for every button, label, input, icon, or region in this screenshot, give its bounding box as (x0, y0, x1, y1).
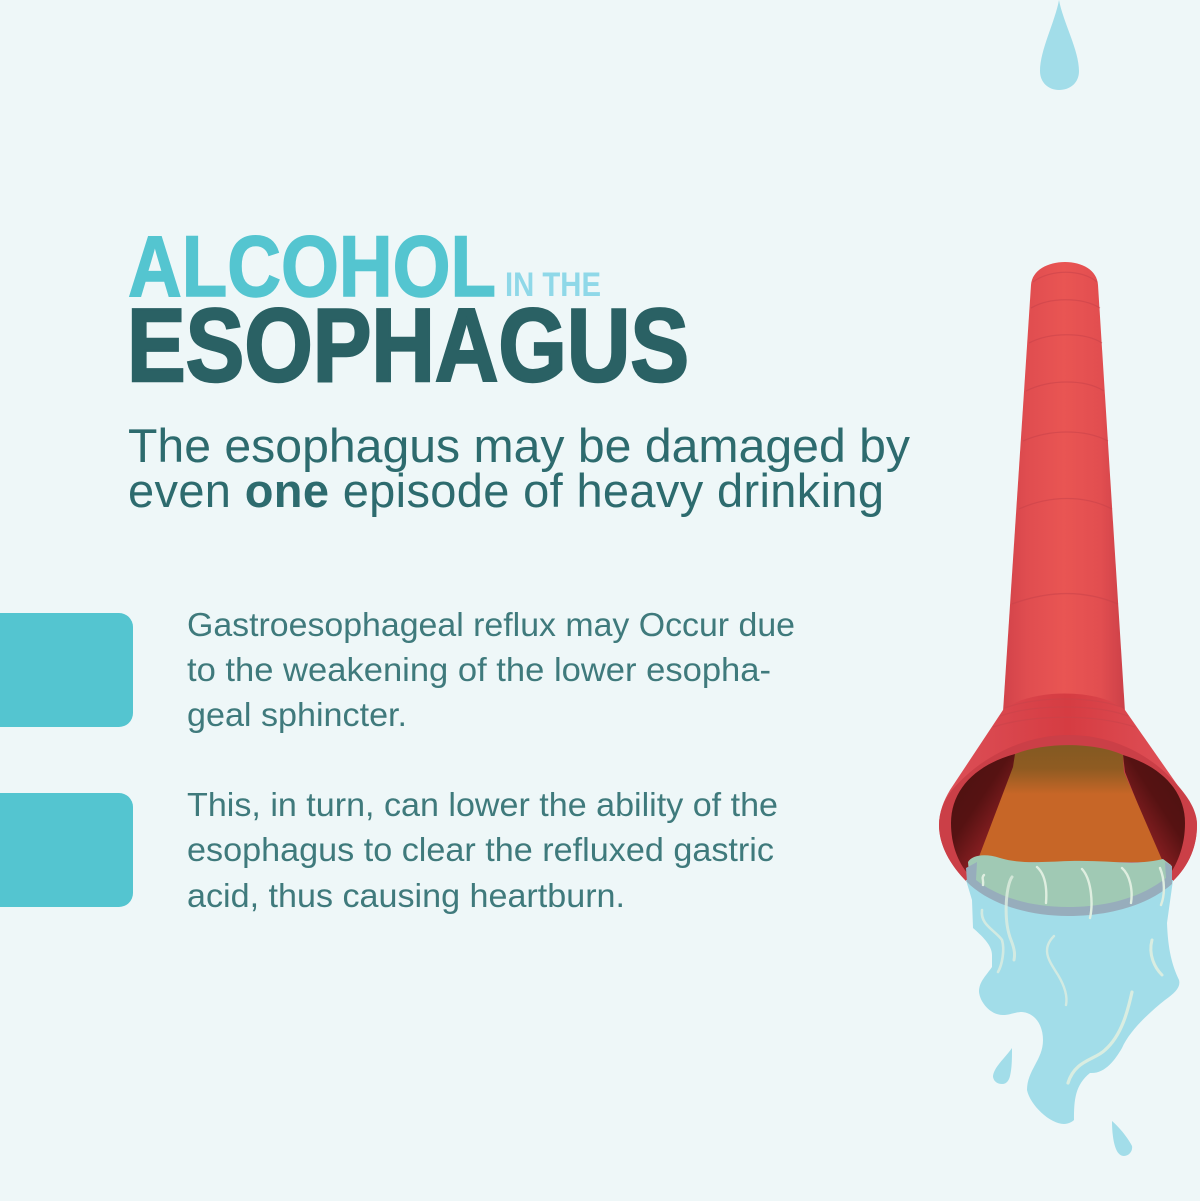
gray lip (966, 862, 1172, 916)
text block 1: to the weakening of the lower esopha- (187, 651, 771, 688)
text block 2: esophagus to clear the refluxed gastric (187, 831, 774, 868)
text block 1: geal sphincter. (187, 696, 407, 733)
subtitle: even one episode of heavy drinking (128, 464, 884, 517)
text block 1 (187, 606, 795, 733)
title: ALCOHOL (128, 219, 496, 315)
side tab 1 (0, 613, 133, 727)
text block 1: Gastroesophageal reflux may Occur due (187, 606, 795, 643)
title: IN THE (505, 266, 601, 304)
rim (939, 735, 1197, 882)
flare ridges (993, 699, 1135, 727)
subtitle (128, 419, 911, 517)
tube (1003, 262, 1125, 712)
water stream (966, 880, 1179, 1124)
text block 2: This, in turn, can lower the ability of the (187, 786, 778, 823)
esophagus illustration (939, 262, 1197, 1156)
side tab 2 (0, 793, 133, 907)
dark interior right (1123, 755, 1185, 874)
tube rings (1012, 272, 1118, 604)
title (127, 219, 689, 404)
dark interior left (951, 754, 1015, 874)
subtitle: The esophagus may be damaged by (128, 419, 911, 472)
icon: falling water drop (1040, 0, 1079, 90)
text block 2: acid, thus causing heartburn. (187, 877, 625, 914)
orange lumen (977, 745, 1163, 862)
small drop left (993, 1048, 1012, 1084)
small drop right (1112, 1121, 1132, 1156)
highlights (982, 867, 1164, 1083)
text block 2 (187, 786, 778, 914)
title: ESOPHAGUS (127, 288, 689, 404)
flared end (939, 694, 1197, 882)
acid pool (968, 855, 1171, 912)
